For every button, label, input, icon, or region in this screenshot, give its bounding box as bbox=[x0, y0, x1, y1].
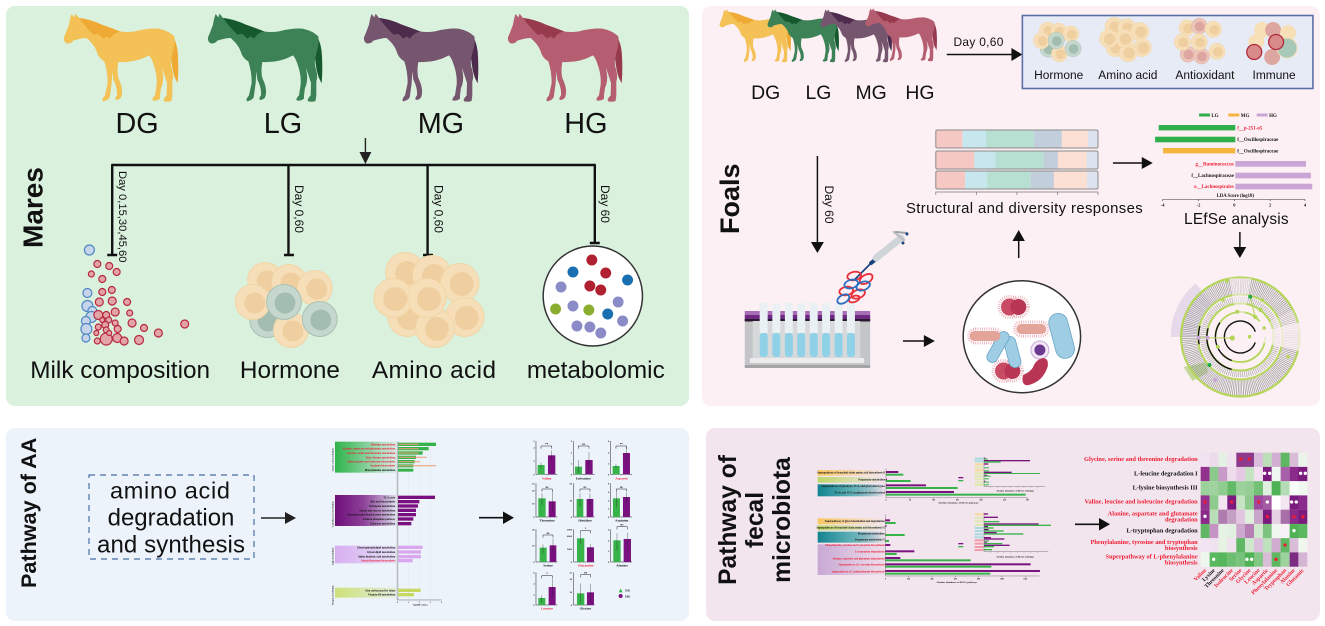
chart: amino acid bar plots: Arginine bbox=[615, 518, 629, 522]
pathway labels: L-tryptophan degradation bbox=[855, 551, 885, 554]
panel: serum indicators box bbox=[1022, 16, 1313, 88]
pathway labels: 50 bbox=[909, 500, 911, 502]
label: LEfSe analysis: LEfSe analysis bbox=[1184, 211, 1289, 228]
foal labels: HG bbox=[905, 82, 934, 104]
heading: Pathway of fecal microbiota: microbiota bbox=[769, 457, 796, 583]
y axis tick values: 5 bbox=[533, 440, 535, 443]
pathway labels: Propanoate metabolism II bbox=[855, 538, 885, 541]
mares diagram bbox=[18, 108, 665, 384]
column labels: Phenylalanine bbox=[1251, 567, 1279, 596]
column labels: Serine bbox=[1228, 567, 1244, 583]
arrow: day 0,60: Day 0,60 bbox=[954, 35, 1004, 49]
column labels: Isoleucine bbox=[1213, 567, 1235, 589]
icon: pipette bbox=[854, 232, 908, 280]
heading: Pathway of fecal microbiota: Pathway of bbox=[715, 454, 742, 585]
horse DG bbox=[64, 14, 178, 102]
chart: amino acid bar plots: * bbox=[585, 527, 587, 531]
spikes bbox=[969, 296, 1048, 382]
chart: amino acid bar plots: HG bbox=[625, 594, 631, 598]
foal LG bbox=[768, 9, 839, 62]
chart: enrichment bars: Steroid hormone biosynthesis bbox=[361, 560, 395, 563]
y axis tick values: 10 bbox=[569, 499, 573, 502]
chart: amino acid bar plots: ns bbox=[584, 571, 588, 575]
arrow: to heatmap bbox=[1075, 518, 1110, 530]
heading: Mares: Mares bbox=[18, 167, 49, 248]
chart: LEfSe bars: 0 bbox=[1233, 202, 1236, 208]
chart: enrichment bars: One carbon pool by folate bbox=[365, 589, 396, 592]
pathway labels: 150 bbox=[956, 500, 959, 502]
day labels: Day 0,15,30,45,60 bbox=[116, 171, 128, 263]
row 4 bbox=[1201, 495, 1307, 510]
y axis tick values: 4 bbox=[533, 582, 535, 585]
row labels: Superpathway of L-phenylalanine bbox=[1106, 553, 1198, 560]
significance markers bbox=[1203, 457, 1307, 561]
chart: amino acid bar plots: Serine bbox=[543, 563, 553, 567]
chart: enrichment bars: Galactose metabolism bbox=[370, 523, 396, 526]
stacked bars: structural responses bbox=[936, 130, 1098, 195]
panel: pathway of AA bbox=[6, 428, 689, 621]
day labels: Day 0,60 bbox=[431, 185, 445, 233]
chart: enrichment bars: Bile acid biosynthesis bbox=[371, 501, 395, 504]
pathway labels: Superpathway of branched-chain amino acid biosynthesis II bbox=[817, 472, 885, 475]
chart: LEfSe bars: f__p-251-o5 bbox=[1237, 126, 1263, 132]
y axis tick values: 20 bbox=[569, 578, 573, 581]
chart: enrichment bars: 1 bbox=[408, 602, 409, 604]
mare horses bbox=[64, 14, 622, 102]
pathway labels: Propanoate metabolism bbox=[858, 479, 886, 482]
y axis tick values: 10 bbox=[532, 503, 535, 506]
arrow: day 0,60 bbox=[947, 35, 1022, 61]
row labels: Glycine, serine and threonine degradation bbox=[1084, 456, 1198, 463]
arrow: rack to microbes bbox=[903, 335, 935, 347]
icon: DNA helix bbox=[836, 271, 874, 306]
chart: enrichment bars: 3 bbox=[430, 602, 431, 604]
icon: hormone cells bbox=[235, 262, 337, 348]
y axis tick values: 10 bbox=[532, 545, 535, 548]
y axis tick values: 0 bbox=[608, 516, 610, 519]
pathway labels: Superpathway of glycol metabolism and degradation bbox=[825, 520, 885, 523]
chart: enrichment bars: Glycerophospholipid metabolism bbox=[357, 546, 396, 549]
pathway labels: 400 bbox=[930, 578, 933, 580]
chart: enrichment bars: 4 bbox=[441, 602, 442, 604]
foal horses bbox=[720, 8, 937, 62]
group labels: HG bbox=[564, 108, 607, 140]
y axis tick values: 4 bbox=[608, 539, 610, 542]
pathway labels: 1000 bbox=[1000, 578, 1004, 580]
arrow: to amino acid bar plots bbox=[479, 512, 514, 524]
arrow: to cladogram bbox=[1233, 232, 1246, 258]
chart: enrichment bars: Vitamin metabolism bbox=[331, 585, 334, 605]
chart: amino acid bar plots: ** bbox=[620, 442, 623, 446]
y axis tick values: 20 bbox=[569, 483, 573, 486]
arrow: day 60: Day 60 bbox=[822, 186, 836, 224]
chart: amino acid bar plots: ** bbox=[545, 442, 549, 446]
y axis tick values: 0 bbox=[571, 516, 573, 519]
foal HG bbox=[866, 8, 937, 61]
chart: LEfSe bars: o__Lachnospirales bbox=[1194, 185, 1234, 190]
pathway labels: 200 bbox=[907, 578, 910, 580]
legend: LG bbox=[1211, 114, 1219, 119]
column labels: Glutamic bbox=[1285, 567, 1306, 588]
arrow: to enrichment chart bbox=[261, 512, 296, 524]
foals diagram bbox=[715, 16, 1313, 396]
chart: enrichment bars: -log10(P value) bbox=[413, 604, 428, 607]
legend: HG bbox=[1269, 114, 1277, 119]
y axis tick values: 2 bbox=[571, 451, 573, 454]
chart: LEfSe bars: 2 bbox=[1269, 202, 1272, 208]
y axis tick values: 2 bbox=[533, 593, 535, 596]
group labels: LG bbox=[264, 108, 302, 140]
scatter: milk composition bbox=[81, 245, 189, 345]
y axis tick values: 4 bbox=[608, 499, 610, 502]
inset bars bottom green bbox=[984, 521, 1051, 550]
y axis tick values: 0 bbox=[571, 604, 573, 607]
y axis tick values: 2 bbox=[608, 508, 610, 511]
chart: amino acid bar plots: Isoleucine bbox=[576, 476, 591, 480]
chart: enrichment bars: Butanoate metabolism bbox=[369, 505, 396, 508]
y axis tick values: 4 bbox=[608, 451, 610, 454]
chart: fecal KEGG pathway bars bbox=[816, 457, 1051, 584]
row 6 bbox=[1201, 524, 1307, 538]
y axis tick values: 25 bbox=[569, 572, 573, 575]
legend bbox=[958, 477, 963, 547]
pathway labels: Superpathway of branched-chain amino acid biosynthesis II bbox=[816, 526, 885, 529]
row 1 bbox=[1201, 453, 1307, 467]
icon: small amino acid bbox=[1099, 17, 1151, 62]
chart: LEfSe bars: 4 bbox=[1304, 202, 1307, 208]
chart: amino acid bar plots: Aspartic bbox=[615, 476, 628, 480]
panel: pathway of fecal microbiota bbox=[706, 428, 1320, 621]
chart: amino acid bar plots: ns bbox=[621, 523, 624, 527]
row labels: L-tryptophan degradation bbox=[1126, 528, 1198, 535]
row 3 bbox=[1201, 481, 1307, 495]
pathway labels: 800 bbox=[977, 578, 980, 580]
y axis tick values: 0 bbox=[571, 561, 573, 564]
foal MG bbox=[821, 9, 892, 62]
chart: enrichment bars: Pentose phosphate pathway bbox=[363, 518, 396, 521]
chart: LEfSe bars: g__Ruminococcus bbox=[1196, 162, 1234, 168]
chart: enrichment bars: Starch and sucrose metabolism bbox=[359, 509, 396, 512]
row labels: L-leucine degradation I bbox=[1134, 470, 1198, 477]
chart: amino acid bar plots: Threonine bbox=[539, 518, 555, 522]
icon: immune cells bbox=[1247, 22, 1297, 65]
box labels: Antioxidant bbox=[1175, 68, 1235, 82]
y axis tick values: 4 bbox=[533, 447, 535, 450]
y axis tick values: 2 bbox=[533, 460, 535, 463]
horse MG bbox=[364, 14, 478, 102]
dashed text box: amino acid bbox=[110, 478, 230, 504]
y axis tick values: 0 bbox=[608, 473, 610, 476]
chart: enrichment bars: Carbohydrate metabolism bbox=[331, 501, 334, 527]
chart: enrichment bars: Glycine, serine and threonine metabolism bbox=[347, 452, 396, 455]
box labels: Amino acid bbox=[1098, 68, 1157, 82]
y axis tick values: 2000 bbox=[567, 548, 573, 551]
chart: amino acid bar plots: ns bbox=[620, 485, 624, 489]
heading: Pathway of AA: Pathway of AA bbox=[16, 437, 41, 588]
chart: enrichment bars: Phenylalanine metabolism bbox=[365, 469, 396, 472]
y axis tick values: 25 bbox=[532, 483, 535, 486]
icon: test tube rack bbox=[745, 303, 870, 368]
chart: LEfSe bars: -2 bbox=[1197, 202, 1201, 208]
chart: amino acid bar plots: ns bbox=[547, 531, 550, 535]
y axis tick values: 10 bbox=[569, 591, 573, 594]
chart: cladogram bbox=[1171, 278, 1302, 396]
y axis tick values: 2 bbox=[608, 550, 610, 553]
y axis tick values: 6 bbox=[533, 572, 535, 575]
heading: Pathway of fecal microbiota: fecal bbox=[742, 492, 769, 548]
chart: amino acid bar plots: Glycine bbox=[580, 607, 591, 611]
chart: enrichment bars: TCA cycle bbox=[383, 496, 396, 499]
group labels bbox=[115, 108, 607, 140]
panel: mares bbox=[6, 6, 689, 406]
y axis tick values: 0 bbox=[533, 473, 535, 476]
foal labels: DG bbox=[751, 82, 780, 104]
row 5 bbox=[1201, 510, 1307, 524]
y axis tick values: 6 bbox=[608, 440, 610, 443]
legend: MG bbox=[1241, 114, 1249, 119]
chart: LEfSe bars bbox=[1155, 114, 1312, 208]
outcome labels: Milk composition bbox=[30, 357, 210, 384]
icon: antioxidant cells bbox=[1174, 18, 1225, 64]
pathway labels: 0 bbox=[885, 578, 886, 580]
dashed text box: and synthesis bbox=[97, 532, 245, 558]
day labels: Day 0,60 bbox=[292, 185, 306, 233]
chart: amino acid bar plots: Glutamine bbox=[578, 563, 594, 567]
pathway labels: 100 bbox=[932, 500, 935, 502]
chart: amino acid bar plots bbox=[532, 440, 632, 611]
chart: enrichment bars: Glycerolipid metabolism bbox=[367, 551, 396, 554]
pathway labels: Absolute abundance of KEGG orthology bbox=[996, 490, 1035, 493]
pathway labels: Alanine, aspartate and glutamate degradation bbox=[832, 557, 885, 560]
row 8 bbox=[1201, 552, 1307, 567]
chart: amino acid bar plots: ns bbox=[582, 442, 586, 446]
column labels: Lysine bbox=[1201, 567, 1217, 583]
outcome labels bbox=[30, 357, 665, 384]
foal labels: MG bbox=[856, 82, 887, 104]
box labels: Hormone bbox=[1034, 68, 1084, 82]
y axis tick values: 6 bbox=[608, 491, 610, 494]
dashed text box: degradation bbox=[108, 504, 234, 532]
chart: amino acid bar plots: ns bbox=[584, 485, 587, 489]
chart: amino acid bar plots: Leucine bbox=[541, 607, 553, 611]
chart: enrichment bars: Valine, leucine and isoleucine biosynthesis bbox=[347, 461, 395, 464]
y axis tick values: 0 bbox=[608, 561, 610, 564]
chart: amino acid bar plots: DG bbox=[625, 589, 631, 593]
row labels: degradation bbox=[1165, 516, 1198, 523]
chart: enrichment bars: 0 bbox=[397, 602, 398, 604]
chart: amino acid bar plots: * bbox=[546, 572, 548, 576]
pathway labels: 600 bbox=[954, 578, 957, 580]
column labels: Leucine bbox=[1244, 567, 1262, 586]
y axis tick values: 3 bbox=[571, 440, 573, 443]
arrow: down to tree bbox=[359, 138, 371, 164]
group labels: MG bbox=[418, 108, 464, 140]
row 7 bbox=[1201, 538, 1307, 552]
pathway labels: Superpathway of glycolysis, TCA, and glyoxylate bypass bbox=[821, 485, 885, 488]
y axis tick values: 0 bbox=[533, 516, 535, 519]
chart: enrichment bars: Alanine, aspartate and glutamate metabolism bbox=[343, 448, 396, 451]
chart: enrichment bars: Arginine biosynthesis bbox=[370, 465, 395, 468]
chart: LEfSe bars: LDA Score (log10) bbox=[1217, 194, 1254, 199]
outcome labels: metabolomic bbox=[527, 357, 665, 384]
heading: Foals: Foals bbox=[715, 163, 745, 234]
heading: Pathway of fecal microbiota bbox=[715, 454, 796, 585]
outcome labels: Hormone bbox=[240, 357, 340, 384]
chart: LEfSe bars: f__Lachnospiraceae bbox=[1191, 174, 1235, 179]
chart: enrichment bars: Amino acid metabolism bbox=[331, 448, 334, 472]
box labels: Immune bbox=[1253, 68, 1296, 82]
horse HG bbox=[508, 14, 622, 102]
y axis tick values: 0 bbox=[571, 473, 573, 476]
chart: amino acid bar plots: Histidine bbox=[578, 518, 592, 522]
pathway labels: Superpathway of L-phenylalanine biosynthesis bbox=[832, 570, 885, 573]
row labels: L-lysine biosynthesis III bbox=[1133, 485, 1198, 492]
column labels: Glycine bbox=[1235, 567, 1253, 585]
foal labels: LG bbox=[805, 82, 831, 104]
pathway labels: Absolute abundance of KEGG pathways bbox=[938, 501, 979, 504]
y axis tick values: 6 bbox=[608, 529, 610, 532]
label: structural responses: Structural and diversity responses bbox=[906, 200, 1143, 217]
pathway labels: Propanoate metabolism bbox=[858, 533, 885, 536]
row labels bbox=[1084, 456, 1198, 566]
y axis tick values: 1 bbox=[571, 462, 573, 465]
column labels: Threonine bbox=[1204, 567, 1226, 590]
row labels: Alanine, aspartate and glutamate bbox=[1108, 510, 1198, 517]
icon: amino acid cells bbox=[374, 252, 484, 348]
row 2 bbox=[1201, 467, 1307, 481]
chart: enrichment bars: Histidine metabolism bbox=[371, 443, 396, 446]
icon: small hormone bbox=[1033, 22, 1081, 62]
pathway labels: 300 bbox=[1026, 500, 1029, 502]
inset bars top bbox=[984, 458, 1030, 482]
arrow: to LEfSe bbox=[1113, 157, 1153, 169]
chart: enrichment bars: Beta-Alanine metabolism bbox=[366, 456, 396, 459]
arrow: day 60 bbox=[811, 156, 836, 253]
inset colour tags bbox=[975, 458, 983, 551]
column labels: Valine bbox=[1193, 567, 1208, 583]
y axis tick values: 20 bbox=[532, 489, 535, 492]
row labels: biosynthesis bbox=[1165, 559, 1198, 566]
chart: amino acid bar plots: ns bbox=[546, 485, 549, 489]
chart: amino acid bar plots: Alanine bbox=[616, 563, 628, 567]
y axis tick values: 20 bbox=[532, 529, 535, 532]
dashed text box bbox=[89, 475, 254, 559]
arrow: up to structure bbox=[1012, 230, 1025, 258]
row labels: biosynthesis bbox=[1165, 545, 1198, 552]
day labels bbox=[116, 171, 612, 263]
horse LG bbox=[208, 14, 322, 102]
pathway labels: 0 bbox=[885, 500, 886, 502]
pathway labels: 200 bbox=[979, 500, 982, 502]
pathway labels: Absolute abundance of KEGG orthology bbox=[996, 555, 1035, 558]
y axis tick values: 0 bbox=[533, 604, 535, 607]
chart: LEfSe bars: f__Oscillospiraceae bbox=[1237, 138, 1279, 143]
pathway labels: Absolute abundance of KEGG pathways bbox=[936, 581, 977, 584]
column labels: Alanine bbox=[1279, 567, 1297, 585]
group labels: DG bbox=[115, 108, 159, 140]
pathway labels: TCA cycle IV (2-oxoglutarate decarboxylase) bbox=[834, 491, 885, 494]
y axis tick values: 5000 bbox=[567, 529, 573, 532]
branch tree bbox=[107, 165, 600, 255]
chart: enrichment bars: Alpha-linolenic acid metabolism bbox=[358, 556, 396, 559]
column labels: Tryptophan bbox=[1263, 567, 1289, 592]
y axis tick values bbox=[532, 440, 610, 607]
chart: correlation heatmap bbox=[1084, 453, 1307, 596]
column labels: Aspartic bbox=[1251, 567, 1270, 587]
foal DG bbox=[720, 9, 791, 62]
chart: LEfSe bars: f__Oscillospiraceae bbox=[1237, 149, 1279, 155]
chart: enrichment bars: Lipid metabolism bbox=[331, 547, 334, 565]
panel: foals bbox=[702, 6, 1320, 406]
chart: enrichment bars: 2 bbox=[419, 602, 420, 604]
row labels: Valine, leucine and isoleucine degradation bbox=[1084, 499, 1198, 506]
pathway labels: Phenylalanine, tyrosine and tryptophan biosynthesis bbox=[825, 544, 885, 547]
icon: metabolomic circle bbox=[543, 246, 642, 346]
column labels bbox=[1193, 567, 1306, 596]
chart: enrichment bars: Vitamin B6 metabolism bbox=[368, 594, 396, 597]
chart: enrichment bars bbox=[331, 442, 442, 607]
y axis tick values: 2 bbox=[608, 462, 610, 465]
pathway labels bbox=[816, 472, 1035, 584]
icon: bacteria circle bbox=[963, 281, 1081, 393]
outcome labels: Amino acid bbox=[372, 357, 496, 384]
chart: enrichment bars: Glyoxylate and dicarboxylate metabolism bbox=[347, 514, 396, 517]
y axis tick values: 0 bbox=[533, 561, 535, 564]
day labels: Day 60 bbox=[598, 185, 612, 223]
y axis tick values: 4000 bbox=[567, 535, 573, 538]
inset bars top green bbox=[984, 459, 1040, 485]
foal labels bbox=[751, 82, 934, 104]
box labels bbox=[1034, 68, 1296, 82]
chart: LEfSe bars: -4 bbox=[1161, 202, 1165, 208]
pathway labels: Superpathway of L-tyrosine biosynthesis bbox=[838, 564, 885, 567]
legend bbox=[1199, 114, 1277, 119]
chart: amino acid bar plots: Valine bbox=[542, 476, 552, 480]
y axis tick values: 8 bbox=[608, 483, 610, 486]
row labels: Phenylalanine, tyrosine and tryptophan bbox=[1091, 539, 1198, 546]
inset bars bottom bbox=[984, 513, 1039, 546]
pathway labels: 250 bbox=[1003, 500, 1006, 502]
pathway labels: 1200 bbox=[1023, 578, 1027, 580]
